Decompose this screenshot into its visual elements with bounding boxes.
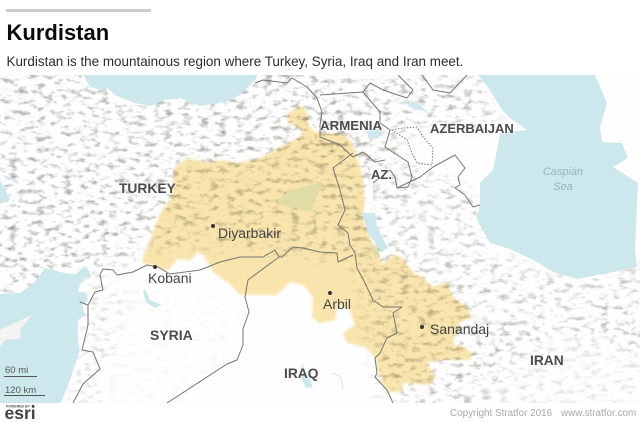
region: Kurdistan shaded area	[143, 105, 472, 392]
country labels: IRAN	[530, 353, 564, 368]
salt lakes on Kurdistan	[278, 183, 380, 258]
copyright footer: www.stratfor.com	[560, 408, 636, 419]
city: Sanandaj: Sanandaj	[430, 321, 489, 337]
country labels: AZ.	[371, 167, 392, 182]
scale bar: 60 mi	[5, 365, 28, 376]
city: Kobani	[149, 265, 191, 283]
terrain relief shading	[0, 75, 640, 403]
top accent rule	[6, 9, 151, 12]
Black Sea	[83, 75, 258, 106]
country labels: AZERBAIJAN	[430, 121, 514, 136]
country borders	[73, 75, 480, 403]
city: Diyarbakir: Diyarbakir	[218, 225, 281, 241]
country labels	[119, 118, 564, 381]
scale bar	[4, 365, 45, 396]
title: Kurdistan	[6, 20, 109, 45]
city: Arbil	[323, 291, 350, 309]
subtitle: Kurdistan is the mountainous region where Turkey, Syria, Iraq and Iran meet.	[6, 54, 463, 69]
copyright footer: Copyright Stratfor 2016	[450, 408, 553, 419]
Caspian Sea label	[544, 167, 583, 190]
country labels: SYRIA	[150, 327, 193, 343]
country labels: ARMENIA	[320, 118, 382, 133]
map panel	[0, 75, 640, 403]
scale bar: 120 km	[5, 385, 36, 396]
Caspian Sea label: Caspian	[543, 166, 583, 178]
Mediterranean Sea	[0, 266, 90, 403]
country labels: TURKEY	[119, 181, 176, 196]
esri logo: POWERED BY	[6, 404, 31, 408]
copyright footer	[450, 408, 636, 419]
Cyprus	[0, 315, 32, 347]
Nagorno-Karabakh dotted boundary	[392, 127, 433, 165]
rivers	[332, 373, 343, 390]
city: Arbil: Arbil	[323, 296, 351, 312]
city: Kobani: Kobani	[148, 270, 192, 286]
Caspian Sea	[477, 75, 638, 279]
lakes	[0, 102, 428, 388]
country labels: IRAQ	[284, 366, 319, 381]
Caspian Sea label: Sea	[553, 181, 573, 193]
